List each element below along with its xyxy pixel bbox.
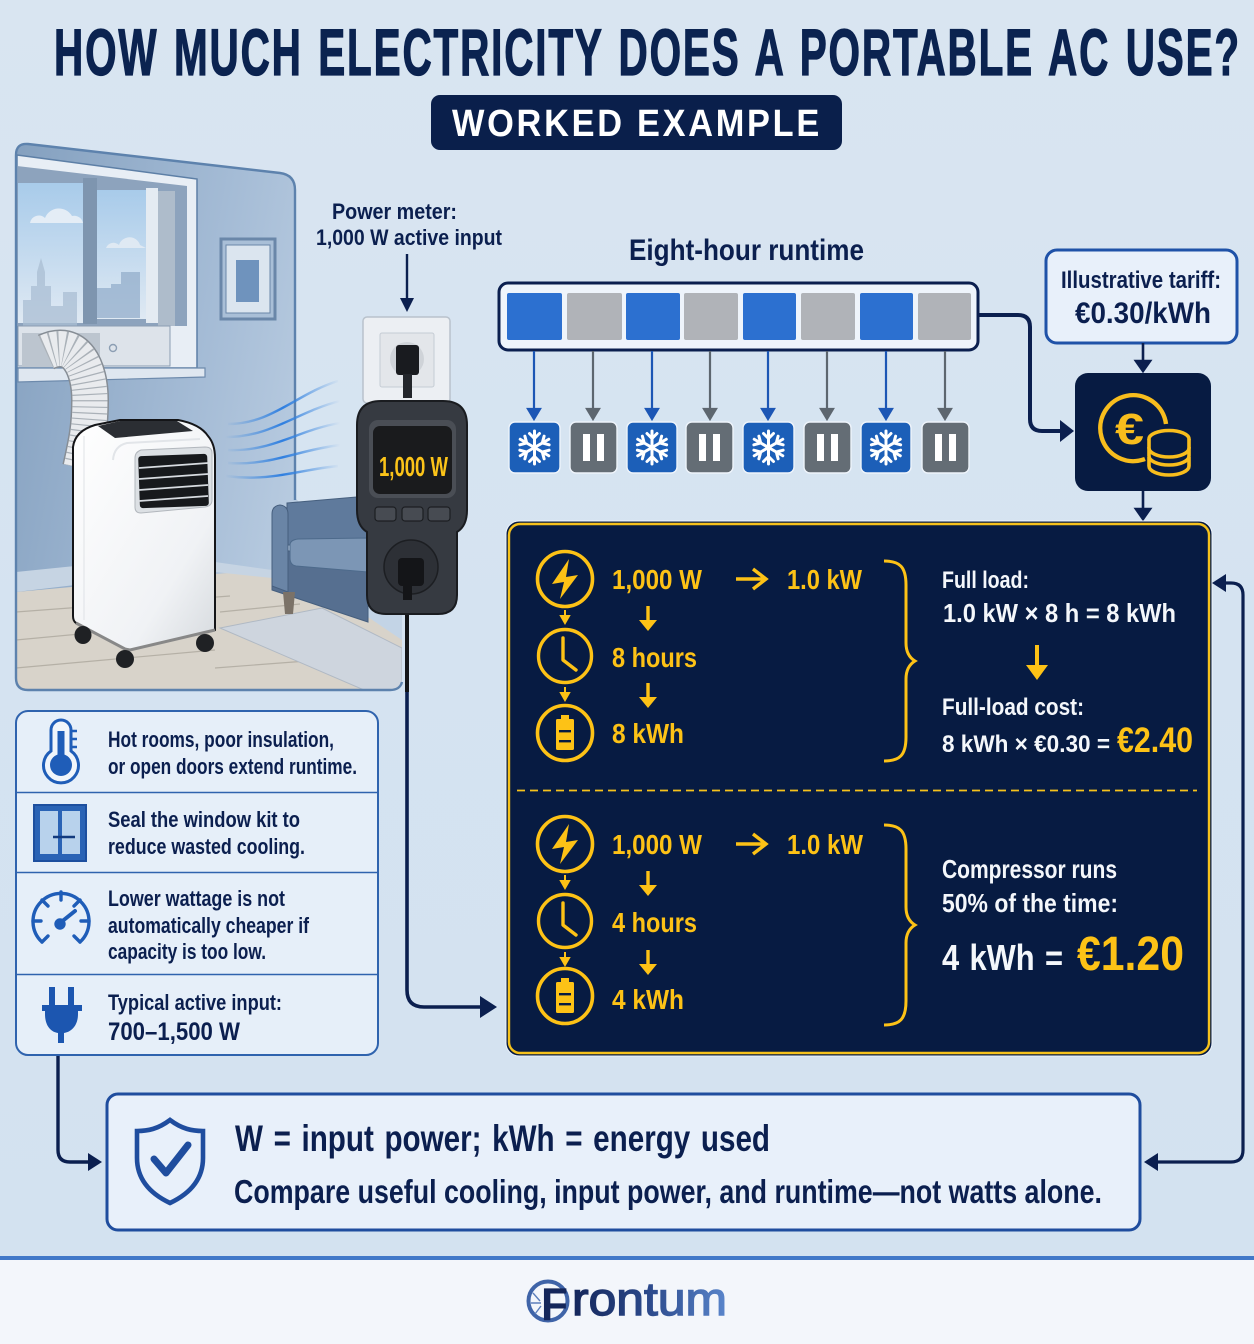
result: full load cost: €2.40 bbox=[1117, 721, 1193, 760]
icon: euro coin and coins: € bbox=[1115, 405, 1144, 454]
meter buttons bbox=[375, 507, 450, 521]
logo: Frontum: F bbox=[541, 1278, 568, 1330]
power meter label: 1,000 W active input bbox=[316, 225, 503, 250]
scenario: full load flow: 1,000 W bbox=[612, 564, 702, 595]
footer bbox=[0, 1256, 1254, 1344]
sofa bbox=[272, 496, 368, 622]
subtitle badge: worked example bbox=[431, 95, 842, 150]
panel: calculations bbox=[506, 521, 1212, 1056]
tip: window kit: Seal the window kit to bbox=[108, 807, 300, 832]
power meter label: Power meter: bbox=[332, 199, 457, 224]
arrow: cost icon to calculation panel bbox=[1136, 491, 1150, 519]
tip: wattage: capacity is too low. bbox=[108, 939, 266, 964]
tip: runtime: Hot rooms, poor insulation, bbox=[108, 727, 334, 752]
connector: tips to takeaway bbox=[58, 1056, 102, 1171]
illustration: room with portable AC bbox=[16, 143, 406, 693]
power meter label bbox=[316, 199, 503, 250]
wheels bbox=[74, 626, 214, 668]
panel: key takeaway bbox=[107, 1094, 1140, 1230]
result: full load cost bbox=[942, 567, 1193, 760]
tip: window kit bbox=[108, 807, 305, 859]
tip: wattage: Lower wattage is not bbox=[108, 886, 286, 911]
scenario: compressor cycling flow: 4 kWh bbox=[612, 984, 684, 1015]
connector: runtime bar to cost icon bbox=[979, 315, 1074, 442]
icon: plug bbox=[42, 987, 82, 1043]
tip: window kit: reduce wasted cooling. bbox=[108, 834, 305, 859]
cool air waves bbox=[224, 381, 340, 478]
scenario: compressor cycling flow: 1.0 kW bbox=[787, 829, 863, 860]
floor bbox=[16, 568, 402, 690]
result: cycling cost: 50% of the time: bbox=[942, 888, 1118, 918]
hose bbox=[46, 348, 90, 468]
tip: wattage bbox=[108, 886, 310, 964]
tip: wattage: automatically cheaper if bbox=[108, 913, 310, 938]
tip: runtime bbox=[108, 727, 357, 779]
scenario: full load flow bbox=[538, 552, 862, 760]
tip: typical input: Typical active input: bbox=[108, 990, 282, 1015]
power meter device bbox=[357, 401, 467, 614]
result: full load cost: Full load: bbox=[942, 567, 1029, 594]
takeaway text bbox=[234, 1118, 1102, 1210]
icon: window bbox=[34, 805, 86, 861]
cable: meter to calculation panel bbox=[407, 590, 497, 1018]
icon: euro coin and coins bbox=[1075, 373, 1211, 491]
result: full load cost: 1.0 kW × 8 h = 8 kWh bbox=[943, 598, 1176, 628]
scenario: full load flow: 8 hours bbox=[612, 642, 697, 673]
icon: thermometer bbox=[43, 720, 79, 783]
brace: full load bbox=[884, 561, 915, 761]
arrow: tariff to cost icon bbox=[1136, 343, 1150, 371]
window frame bbox=[17, 155, 197, 368]
result: cycling cost: Compressor runs bbox=[942, 854, 1117, 884]
icon: gauge bbox=[33, 892, 89, 942]
heading: eight-hour runtime: Eight-hour runtime bbox=[629, 234, 864, 267]
tariff box: €0.30/kWh bbox=[1075, 297, 1211, 330]
result: cycling cost: 4 kWh = bbox=[942, 937, 1063, 978]
logo: Frontum bbox=[528, 1273, 727, 1330]
meter screen: 1,000 W bbox=[379, 451, 448, 482]
result: cycling cost: €1.20 bbox=[1077, 928, 1184, 981]
brace: compressor cycling bbox=[884, 825, 915, 1025]
window kit bbox=[18, 326, 205, 382]
rug bbox=[220, 608, 402, 690]
room outline bbox=[16, 144, 402, 690]
arrows: runtime segments to states bbox=[528, 351, 951, 419]
tariff box bbox=[1046, 250, 1237, 343]
portable AC unit bbox=[73, 420, 215, 668]
tariff box: Illustrative tariff: bbox=[1061, 267, 1221, 294]
subtitle badge: worked example: WORKED EXAMPLE bbox=[452, 103, 822, 145]
takeaway text: W = input power; kWh = energy used bbox=[235, 1118, 770, 1159]
skirting board bbox=[16, 562, 272, 592]
arrow: label to outlet bbox=[400, 254, 414, 312]
icon: shield with check bbox=[137, 1120, 203, 1203]
result: full load cost: 8 kWh × €0.30 = bbox=[942, 731, 1110, 758]
logo: Frontum: rontum bbox=[572, 1273, 727, 1325]
tip: runtime: or open doors extend runtime. bbox=[108, 754, 357, 779]
scenario: full load flow: 8 kWh bbox=[612, 718, 684, 749]
result: cycling cost bbox=[942, 854, 1184, 981]
wall outlet bbox=[363, 317, 450, 403]
result: full load cost: Full-load cost: bbox=[942, 694, 1084, 721]
scenario: compressor cycling flow: 4 hours bbox=[612, 907, 697, 938]
meter socket with plug bbox=[384, 540, 438, 600]
picture frame bbox=[221, 239, 275, 319]
tip: typical input bbox=[108, 990, 282, 1046]
cooling and pause state icons bbox=[509, 422, 969, 473]
connector: takeaway to calculation panel bbox=[1144, 574, 1243, 1171]
tip: typical input: 700–1,500 W bbox=[108, 1018, 240, 1046]
scenario: full load flow: 1.0 kW bbox=[787, 564, 862, 595]
runtime bar bbox=[499, 283, 978, 350]
panel: factors and tips bbox=[16, 711, 378, 1055]
scenario: compressor cycling flow bbox=[538, 816, 863, 1024]
meter screen bbox=[373, 426, 452, 494]
scenario: compressor cycling flow: 1,000 W bbox=[612, 829, 702, 860]
